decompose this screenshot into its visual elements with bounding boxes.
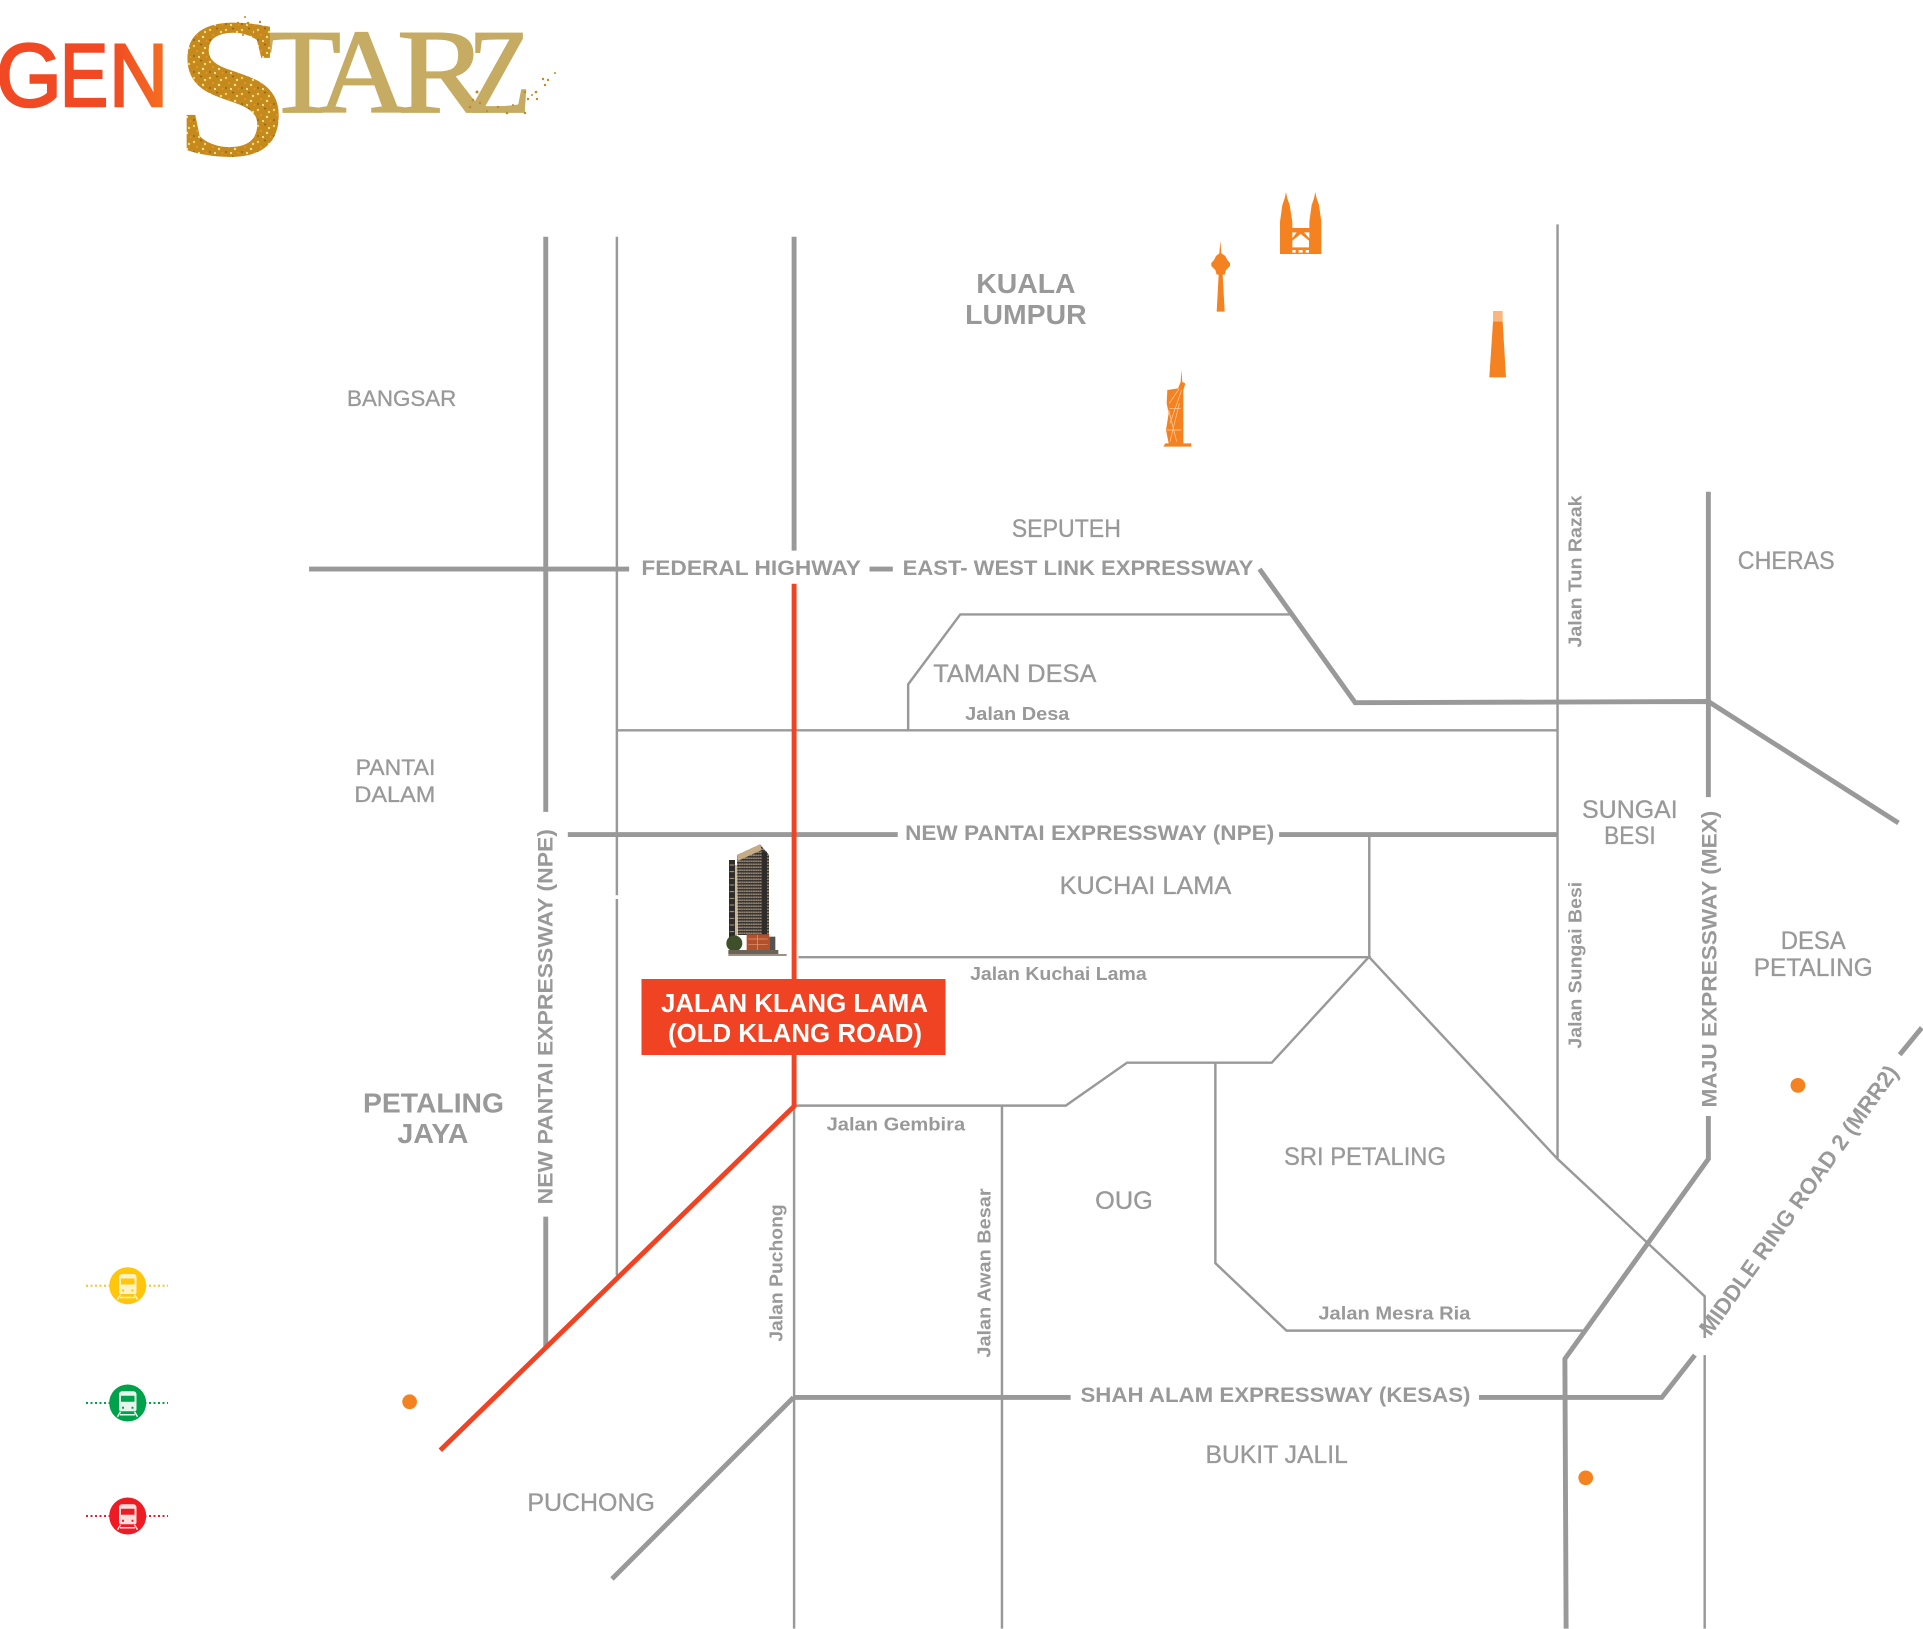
logo word: TARZ (264, 5, 531, 139)
road labels: EAST- WEST LINK EXPRESSWAY (903, 556, 1253, 580)
callout: Jalan Klang Lama: JALAN KLANG LAMA (661, 990, 928, 1018)
Jalan Klang Lama red road (440, 584, 794, 1450)
area labels: BANGSAR (347, 386, 456, 411)
road map (309, 224, 1922, 1629)
area labels: PUCHONG (527, 1490, 655, 1517)
area labels: SEPUTEH (1012, 516, 1121, 543)
legend: rail lines (86, 1267, 168, 1534)
area labels: LUMPUR (965, 298, 1087, 330)
road labels: NEW PANTAI EXPRESSWAY (NPE) (905, 821, 1274, 845)
area labels: DESA (1781, 928, 1846, 955)
road labels: Jalan Desa (965, 703, 1070, 724)
icon: Petronas Towers, KL Tower, Exchange 106 and Bank Rakyat landmarks (1163, 192, 1506, 447)
road labels: Jalan Gembira (827, 1114, 966, 1135)
area labels: SUNGAI (1582, 797, 1678, 824)
logo word: TARZ: R (397, 5, 488, 138)
area labels: PETALING (1754, 955, 1873, 982)
icon: Exchange 106 (1489, 311, 1506, 377)
road labels: SHAH ALAM EXPRESSWAY (KESAS) (1080, 1383, 1470, 1407)
logo: Gen Starz (0, 0, 556, 199)
legend item: green rail (86, 1384, 168, 1422)
area labels: BUKIT JALIL (1206, 1442, 1348, 1469)
road labels: Jalan Sungai Besi (1564, 882, 1585, 1049)
icon: Petronas Towers (1280, 192, 1321, 254)
icon: Bank Rakyat tower (1163, 370, 1191, 447)
logo word: TARZ: T (264, 5, 341, 138)
road labels: Jalan Mesra Ria (1318, 1303, 1471, 1324)
logo sparkles (237, 16, 556, 114)
legend item: yellow rail (86, 1267, 168, 1304)
road labels: Jalan Kuchai Lama (970, 963, 1148, 984)
road labels: Jalan Tun Razak (1564, 495, 1585, 648)
callout: Jalan Klang Lama (642, 979, 946, 1055)
icon: KL Tower (1211, 241, 1230, 312)
area labels: CHERAS (1738, 548, 1835, 575)
area labels: KUCHAI LAMA (1060, 873, 1232, 900)
road labels: FEDERAL HIGHWAY (641, 556, 861, 580)
road labels: MIDDLE RING ROAD 2 (MRR2) (1693, 1060, 1903, 1340)
area labels: PETALING (363, 1086, 504, 1118)
callout: Jalan Klang Lama: (OLD KLANG ROAD) (668, 1020, 922, 1048)
thin roads (617, 224, 1705, 1629)
area labels: OUG (1095, 1188, 1153, 1215)
area labels: JAYA (397, 1117, 468, 1149)
area labels (347, 267, 1873, 1517)
area labels: BESI (1604, 823, 1656, 850)
area labels: DALAM (354, 782, 435, 807)
road labels: Jalan Awan Besar (973, 1188, 994, 1358)
road labels: Jalan Puchong (765, 1204, 786, 1342)
road labels (533, 495, 1903, 1407)
logo word: GEN: N (109, 27, 168, 126)
logo word: GEN (0, 26, 168, 126)
icon: Gen Starz building (726, 844, 787, 956)
area labels: PANTAI (356, 755, 435, 780)
logo word: TARZ: A (317, 5, 408, 138)
area labels: SRI PETALING (1284, 1144, 1446, 1171)
area labels: KUALA (976, 267, 1076, 299)
logo word: TARZ: Z (468, 6, 531, 139)
road labels: MAJU EXPRESSWAY (MEX) (1697, 811, 1721, 1107)
road labels: NEW PANTAI EXPRESSWAY (NPE) (533, 829, 557, 1204)
area labels: TAMAN DESA (933, 661, 1097, 688)
location dots (402, 1078, 1805, 1485)
legend item: red rail (86, 1498, 168, 1534)
logo word: GEN: E (60, 27, 108, 126)
thick roads (309, 237, 1922, 1629)
